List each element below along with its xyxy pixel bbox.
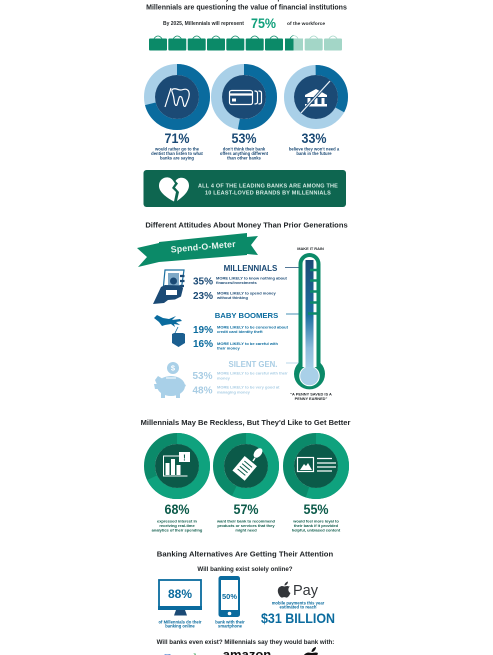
banner: least-loved brands: [144, 170, 346, 207]
text: 68%: [152, 501, 203, 533]
text: 71%: 71%: [164, 130, 190, 146]
text: 68%: expressed interest in: [157, 518, 198, 524]
label: silent generation: [229, 360, 300, 369]
title: Millennials are questioning the value of financial institutions: [146, 4, 347, 12]
icon: hand with money: [153, 270, 184, 304]
text: online banking: banking online: [165, 624, 195, 628]
chart: thermometer: MAKE IT RAIN: [297, 246, 324, 251]
text: online banking: [158, 620, 202, 628]
text: smartphone: [215, 620, 245, 628]
icon: article image: [298, 458, 336, 472]
stat: 53%: [192, 370, 288, 382]
label: millennials: MILLENNIALS: [224, 264, 278, 273]
donut: 55% content: [288, 438, 344, 494]
label: baby boomers: [215, 311, 308, 320]
stat: 16%: their money: [217, 346, 240, 350]
label: baby boomers: BABY BOOMERS: [215, 311, 278, 320]
text: 53%: 53%: [232, 130, 257, 146]
text: smartphone: smartphone: [218, 624, 243, 628]
label: silent generation: SILENT GEN.: [229, 360, 277, 369]
stat: 19%: [193, 324, 289, 336]
icon: broken heart: [159, 177, 189, 202]
stat: 48%: managing money: [217, 390, 251, 394]
text: 71%: dentist than listen to what: [151, 151, 203, 156]
icon row: briefcases: [149, 36, 342, 50]
stat: 53%: 53%: [192, 371, 213, 382]
stat: $31 billion: mobile payments this year: [272, 600, 325, 606]
text: 55%: helpful, unbiased content: [292, 528, 341, 533]
donut: 57% recommendations: [218, 438, 274, 494]
heading: alternatives: Banking Alternatives Are Getting Their Attention: [157, 550, 334, 558]
text: 55%: 55%: [304, 501, 329, 517]
stat: 35%: MORE LIKELY to know nothing about: [216, 276, 288, 280]
stat: 19%: credit card identity theft: [217, 329, 263, 334]
stat: 16%: [193, 339, 278, 350]
stat: 23%: without thinking: [216, 295, 248, 300]
banner: least-loved brands: ALL 4 OF THE LEADING BANKS ARE AMONG THE: [198, 184, 338, 190]
label: millennials: [224, 264, 307, 273]
workforce statistic: [163, 15, 325, 31]
text: 53%: than other banks: [227, 156, 262, 160]
heading: reckless: Millennials May Be Reckless, But They'd Like to Get Better: [141, 418, 350, 427]
icon: tooth: [165, 88, 189, 107]
title: [146, 0, 347, 12]
icon: piggy bank: [154, 362, 186, 398]
chart: thermometer: "A PENNY SAVED IS A: [290, 392, 332, 396]
text: 57%: [216, 501, 276, 533]
text: 53%: [220, 130, 269, 160]
icon: bar chart alert: [163, 452, 190, 476]
text: smartphone: bank with their: [215, 620, 245, 624]
stat: 16%: 16%: [193, 339, 213, 350]
workforce statistic: 75%: [251, 15, 276, 31]
ribbon: Spend-O-Meter: [137, 233, 258, 267]
text: 68%: 68%: [164, 501, 190, 517]
text: 55%: would feel more loyal to: [292, 518, 339, 524]
stat: 16%: MORE LIKELY to be careful with: [217, 341, 278, 346]
subheading: online: Will banking exist solely online?: [197, 566, 293, 573]
chart: thermometer: [290, 246, 332, 401]
stat: 19%: 19%: [193, 325, 213, 336]
banner: least-loved brands: 10 LEAST-LOVED BRANDS BY MILLENNIALS: [205, 190, 331, 196]
text: 71%: would rather go to the: [154, 146, 200, 152]
stat: 19%: MORE LIKELY to be concerned about: [217, 324, 289, 330]
donut: 68% analytics: !: [183, 454, 186, 462]
icon: hand dropping pocket: [154, 315, 185, 347]
icon: monitor 88%: 88%: [168, 587, 192, 601]
text: 57%: might need: [235, 528, 257, 533]
logo: Apple Pay: [278, 582, 319, 599]
text: 71%: [151, 130, 203, 160]
stat: 48%: 48%: [192, 386, 213, 396]
logos: Google, Amazon, Apple: [162, 647, 320, 655]
text: 68%: analytics of their spending: [152, 528, 203, 533]
donut: 33% no bank: [289, 70, 343, 124]
icon: notepad and quill: [232, 447, 264, 481]
stat: 35%: finances/investments: [216, 280, 257, 285]
text: 57%: want their bank to recommend: [216, 518, 276, 524]
stat: $31 billion: estimated to reach: [279, 604, 317, 610]
stat: 53%: MORE LIKELY to be careful with their: [217, 370, 288, 376]
chart: thermometer: PENNY EARNED": [295, 396, 327, 401]
text: 57%: products or services that they: [217, 523, 275, 528]
donut: 68% analytics: [150, 438, 204, 494]
stat: 23%: [193, 290, 276, 302]
text: 33%: bank in the future: [296, 151, 332, 156]
donut: 53% bank: [216, 70, 272, 124]
icon: monitor 88%: [158, 580, 202, 616]
workforce statistic: By 2025, Millennials will represent: [163, 21, 244, 27]
stat: $31 billion: [261, 600, 335, 626]
stat: $31 billion: $31 BILLION: [261, 610, 335, 626]
icon: piggy bank: $: [171, 364, 176, 373]
text: online banking: of Millennials do their: [158, 620, 202, 624]
heading: attitudes: Different Attitudes About Money Than Prior Generations: [145, 220, 348, 230]
donut: 71% dentist: [150, 70, 204, 124]
logo: Apple Pay: Pay: [293, 583, 319, 599]
workforce statistic: of the workforce: [287, 21, 325, 27]
text: 55%: [292, 501, 341, 533]
stat: 53%: money: [217, 376, 231, 380]
text: 68%: receiving real-time: [159, 523, 195, 528]
stat: 23%: 23%: [193, 291, 213, 302]
stat: 48%: [192, 384, 280, 396]
text: 33%: [289, 130, 340, 156]
stat: 35%: [193, 276, 288, 288]
text: 53%: don't think their bank: [223, 146, 266, 152]
ribbon: Spend-O-Meter: Spend-O-Meter: [170, 239, 236, 254]
text: 33%: 33%: [302, 130, 327, 146]
icon: smartphone 50%: 50%: [222, 592, 237, 601]
icon: crossed bank: [301, 81, 330, 113]
text: 71%: banks are saying: [160, 156, 194, 160]
subheading: banks exist: Will banks even exist? Millennials say they would bank with:: [157, 639, 334, 646]
text: 33%: believe they won't need a: [289, 146, 340, 152]
stat: 35%: 35%: [193, 276, 213, 288]
icon: credit cards: [230, 90, 262, 104]
stat: 23%: MORE LIKELY to spend money: [217, 290, 276, 296]
icon: smartphone 50%: [218, 576, 240, 617]
text: 57%: 57%: [234, 501, 259, 517]
text: 55%: their bank if it provided: [294, 523, 339, 528]
stat: 48%: MORE LIKELY to be very good at: [217, 384, 280, 390]
text: 53%: offers anything different: [220, 151, 269, 156]
